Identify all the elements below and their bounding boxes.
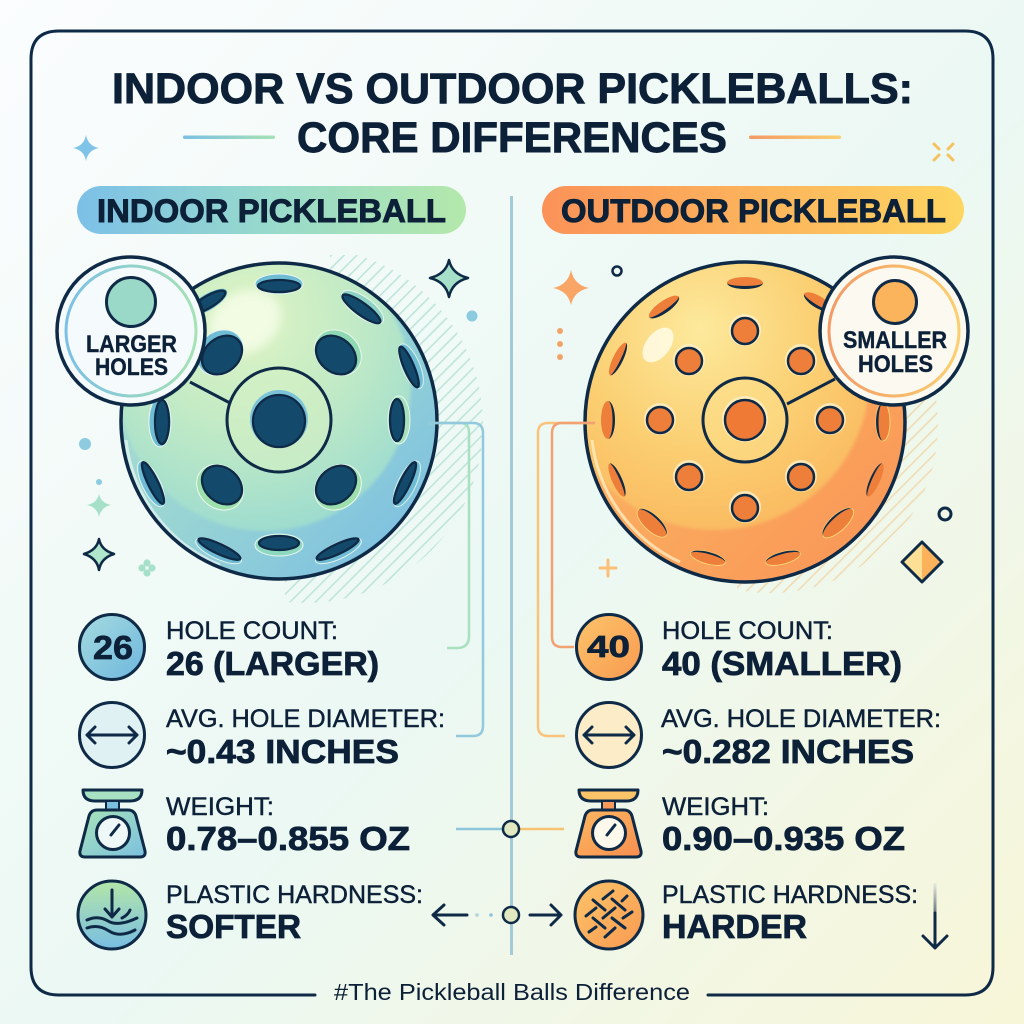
row: outdoor hole count: 40 (SMALLER) — [662, 645, 902, 682]
heading: indoor pill: INDOOR PICKLEBALL — [97, 193, 446, 229]
row: indoor weight: 0.78–0.855 OZ — [166, 820, 410, 857]
indoor ball — [119, 239, 437, 579]
icon: 40 badge — [576, 614, 642, 680]
callout: larger holes: LARGER — [86, 331, 177, 358]
row: outdoor weight: WEIGHT: — [662, 793, 769, 821]
row: outdoor weight — [576, 790, 905, 857]
weight connector — [456, 821, 564, 837]
outdoor ball — [583, 260, 907, 584]
outdoor center hole — [703, 378, 787, 462]
title: CORE DIFFERENCES — [297, 114, 727, 162]
row: outdoor hardness: HARDER — [662, 908, 807, 945]
indoor center hole — [227, 368, 331, 472]
callout line: indoor — [190, 382, 230, 403]
icon: blue sparkle — [73, 135, 99, 161]
icon: soft waves — [78, 881, 146, 949]
heading: indoor pill — [77, 186, 466, 234]
icon: outdoor scale — [576, 790, 641, 857]
row: outdoor hole diameter — [576, 702, 941, 770]
center divider — [510, 196, 513, 955]
callout: smaller holes: SMALLER — [843, 327, 947, 354]
connectors: indoor — [428, 423, 483, 736]
row: outdoor hardness: PLASTIC HARDNESS: — [662, 881, 918, 909]
footer hashtag: #The Pickleball Balls Difference — [334, 979, 690, 1005]
row: indoor hardness: PLASTIC HARDNESS: — [166, 881, 423, 909]
callout: smaller holes — [820, 257, 968, 405]
icon: 40 badge: 40 — [587, 629, 630, 664]
row: outdoor hole count: HOLE COUNT: — [662, 617, 833, 645]
row: outdoor hardness — [575, 881, 918, 949]
row: indoor hardness: SOFTER — [166, 908, 301, 945]
row: indoor hole count: HOLE COUNT: — [166, 617, 338, 645]
row: outdoor weight: 0.90–0.935 OZ — [662, 820, 905, 857]
row: indoor hardness — [78, 881, 423, 949]
hardness connector with arrows — [433, 905, 561, 925]
callout: larger holes: HOLES — [95, 354, 168, 381]
icon: indoor scale — [80, 790, 145, 857]
icon: outdoor diameter — [576, 702, 642, 768]
row: indoor hole diameter — [80, 702, 445, 770]
heading: outdoor pill — [542, 186, 964, 234]
outdoor edge holes — [601, 277, 890, 568]
row: outdoor hole diameter: ~0.282 INCHES — [662, 733, 914, 770]
decorations: outdoor — [553, 266, 951, 582]
heading: outdoor pill: OUTDOOR PICKLEBALL — [561, 193, 946, 229]
hatching: indoor — [285, 255, 483, 603]
row: indoor weight: WEIGHT: — [166, 793, 274, 821]
title — [112, 65, 913, 162]
icon: hard weave — [575, 881, 643, 949]
connectors: outdoor — [538, 423, 595, 736]
icon: 26 badge: 26 — [93, 629, 133, 666]
outdoor small holes — [644, 314, 846, 523]
row: outdoor hole diameter: AVG. HOLE DIAMETER: — [661, 705, 941, 733]
callout line: outdoor — [787, 379, 835, 404]
row: outdoor hole count — [576, 614, 902, 682]
row: indoor hole diameter: ~0.43 INCHES — [166, 733, 399, 770]
title: INDOOR VS OUTDOOR PICKLEBALLS: — [112, 65, 913, 113]
icon: 26 badge — [80, 614, 144, 680]
row: indoor hole count — [80, 614, 379, 682]
callout: larger holes — [57, 257, 205, 405]
icon: yellow burst — [934, 144, 953, 160]
indoor holes — [132, 274, 429, 569]
icon: indoor diameter — [80, 702, 144, 768]
row: indoor weight — [80, 790, 410, 857]
callout: smaller holes: HOLES — [858, 351, 933, 378]
row: indoor hole diameter: AVG. HOLE DIAMETER: — [166, 705, 445, 733]
hatching: outdoor — [737, 400, 938, 593]
down arrow — [923, 883, 947, 948]
row: indoor hole count: 26 (LARGER) — [166, 645, 379, 682]
decorations: indoor — [79, 260, 478, 577]
